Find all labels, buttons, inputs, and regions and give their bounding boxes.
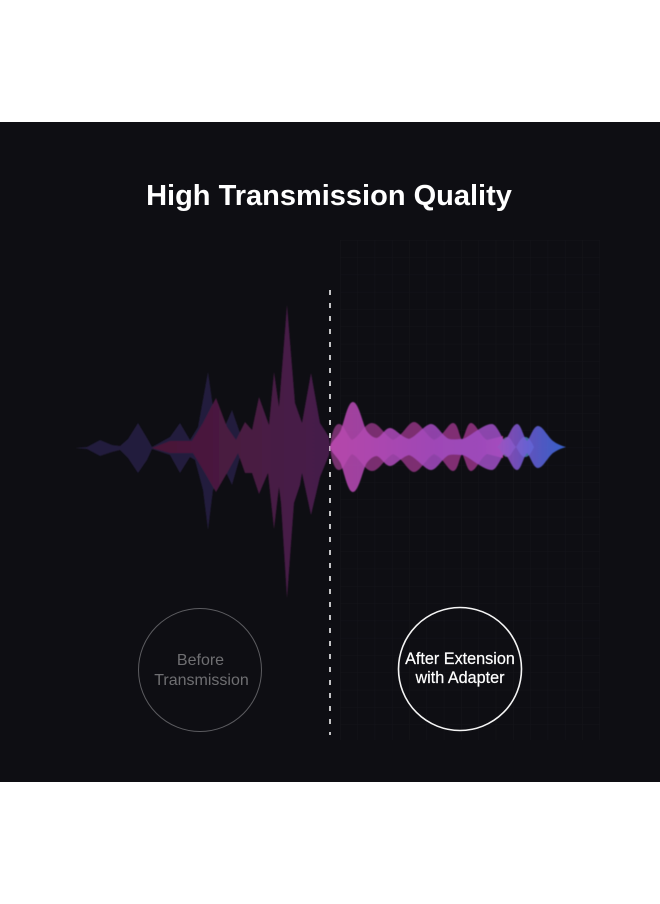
badge: before transmission <box>138 608 262 732</box>
badge: before transmission: Before <box>177 652 224 669</box>
dark panel <box>0 122 660 782</box>
badge: after extension with adapter: with Adapter <box>414 669 505 687</box>
background grid <box>340 240 600 740</box>
divider: dashed line <box>329 290 331 735</box>
badge: after extension with adapter <box>398 608 522 730</box>
badge: after extension with adapter: After Extension <box>405 650 515 668</box>
waveform: after extension <box>330 402 566 492</box>
title: High Transmission Quality <box>146 180 512 212</box>
badge: before transmission: Transmission <box>154 672 249 689</box>
waveform: before transmission <box>75 305 330 598</box>
